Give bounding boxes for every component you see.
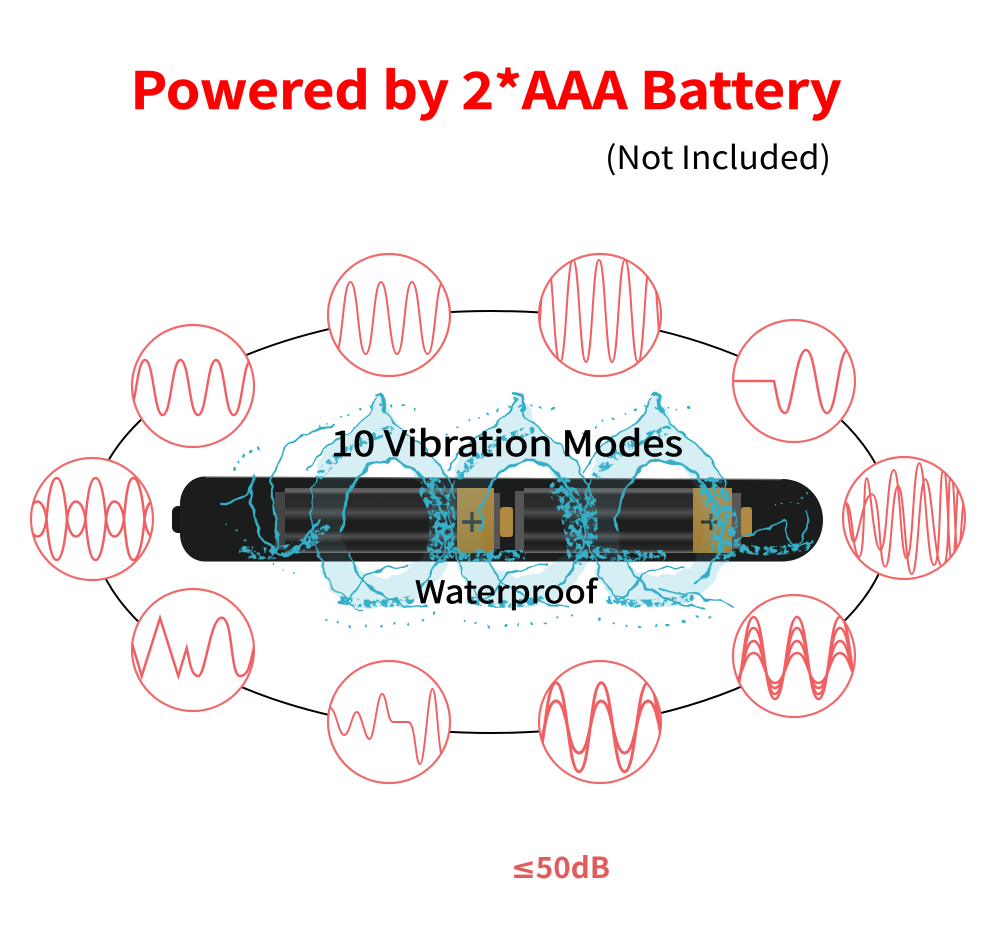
speckled foam	[245, 430, 806, 604]
water tint over the bullet	[312, 395, 732, 608]
battery 2	[515, 488, 752, 553]
splash strokes	[223, 395, 813, 626]
mode 9	[131, 589, 256, 711]
end nub	[172, 506, 188, 533]
mode 2	[328, 254, 458, 376]
mode 6	[732, 595, 862, 717]
mode 1	[127, 325, 254, 447]
right splash	[733, 512, 813, 547]
mode 7	[533, 661, 671, 783]
mode 4	[733, 320, 866, 442]
mode 3	[534, 254, 664, 376]
water splash	[223, 395, 813, 626]
battery 1	[275, 488, 513, 553]
title: Powered by 2*AAA Battery	[130, 50, 842, 124]
mode 10	[28, 458, 163, 580]
ring connecting the modes	[91, 311, 891, 733]
mode 5	[843, 457, 966, 579]
left splash	[223, 478, 318, 553]
pale water behind the bullet	[312, 395, 732, 608]
plus mark	[462, 512, 482, 532]
mode 8	[328, 661, 450, 783]
label: noise level: ≤50dB	[511, 845, 610, 887]
label: 10 Vibration Modes: 10 Vibration Modes	[331, 416, 683, 467]
label: Waterproof: Waterproof	[415, 567, 599, 612]
bottom tail	[660, 590, 734, 607]
subtitle: not included: (Not Included)	[605, 133, 831, 179]
black capsule	[180, 476, 823, 562]
plus mark	[701, 514, 722, 530]
bullet vibrator body	[172, 476, 823, 562]
